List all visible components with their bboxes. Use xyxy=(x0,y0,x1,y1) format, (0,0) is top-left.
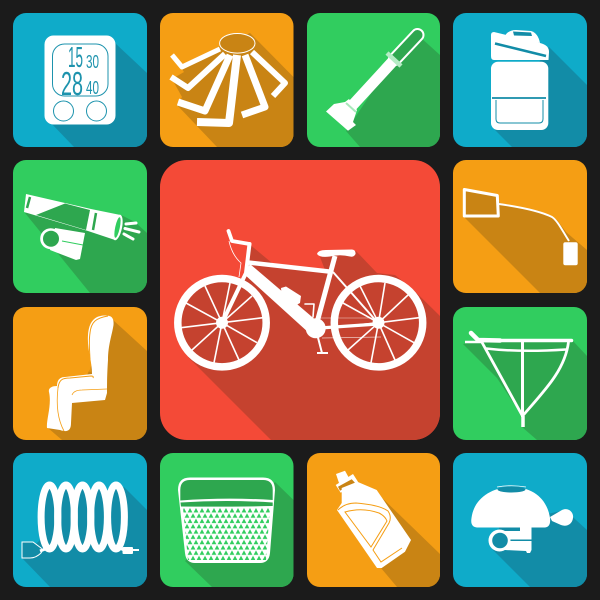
panel: hex key set xyxy=(160,13,294,147)
panel: child seat xyxy=(13,307,147,440)
left wheel xyxy=(178,278,266,367)
icon: cycle computer: 40 xyxy=(86,78,99,98)
long shadow xyxy=(495,47,587,147)
long shadow xyxy=(48,320,147,440)
panel: water bottle with cage xyxy=(307,453,440,587)
icon: flashlight with clamp xyxy=(24,194,139,260)
long shadow xyxy=(25,210,147,293)
panel: bicycle xyxy=(160,160,440,440)
panel: rear-view mirror xyxy=(453,160,587,293)
long shadow xyxy=(463,340,587,440)
panel: bike bag xyxy=(453,13,587,147)
icon: coil lock xyxy=(22,485,139,558)
icon: bottle xyxy=(336,471,411,568)
panel: cable lock xyxy=(13,453,147,587)
icon: bag xyxy=(491,30,549,130)
panel: rear rack xyxy=(453,307,587,440)
icon: bell xyxy=(471,486,573,553)
icon: mirror with cable xyxy=(464,190,578,265)
icon: child seat xyxy=(47,315,114,431)
panel: bell xyxy=(453,453,587,587)
panel: cycle computer xyxy=(13,13,147,147)
icon: cycle computer: 15 xyxy=(68,42,83,74)
icon: bicycle xyxy=(178,231,423,367)
icon: cycle computer: 30 xyxy=(86,51,99,72)
long shadow xyxy=(185,482,294,587)
long shadow xyxy=(464,195,587,293)
panel: bicycle pump xyxy=(307,13,440,147)
icon: basket xyxy=(178,478,275,563)
icon: cycle computer: 28 xyxy=(61,65,83,102)
long shadow xyxy=(22,487,147,587)
panel: basket xyxy=(160,453,294,587)
icon: hex keys xyxy=(171,34,285,123)
long shadow xyxy=(493,510,587,587)
icon: cycle computer xyxy=(44,36,116,124)
icon: rack xyxy=(465,333,572,427)
long shadow xyxy=(50,43,147,147)
panel: bike light xyxy=(13,160,147,293)
right wheel xyxy=(334,278,423,367)
long shadow xyxy=(177,243,440,440)
long shadow xyxy=(172,33,294,147)
frame xyxy=(222,231,381,353)
icon: pump xyxy=(326,35,418,131)
long shadow xyxy=(381,498,440,587)
long shadow xyxy=(346,37,440,147)
